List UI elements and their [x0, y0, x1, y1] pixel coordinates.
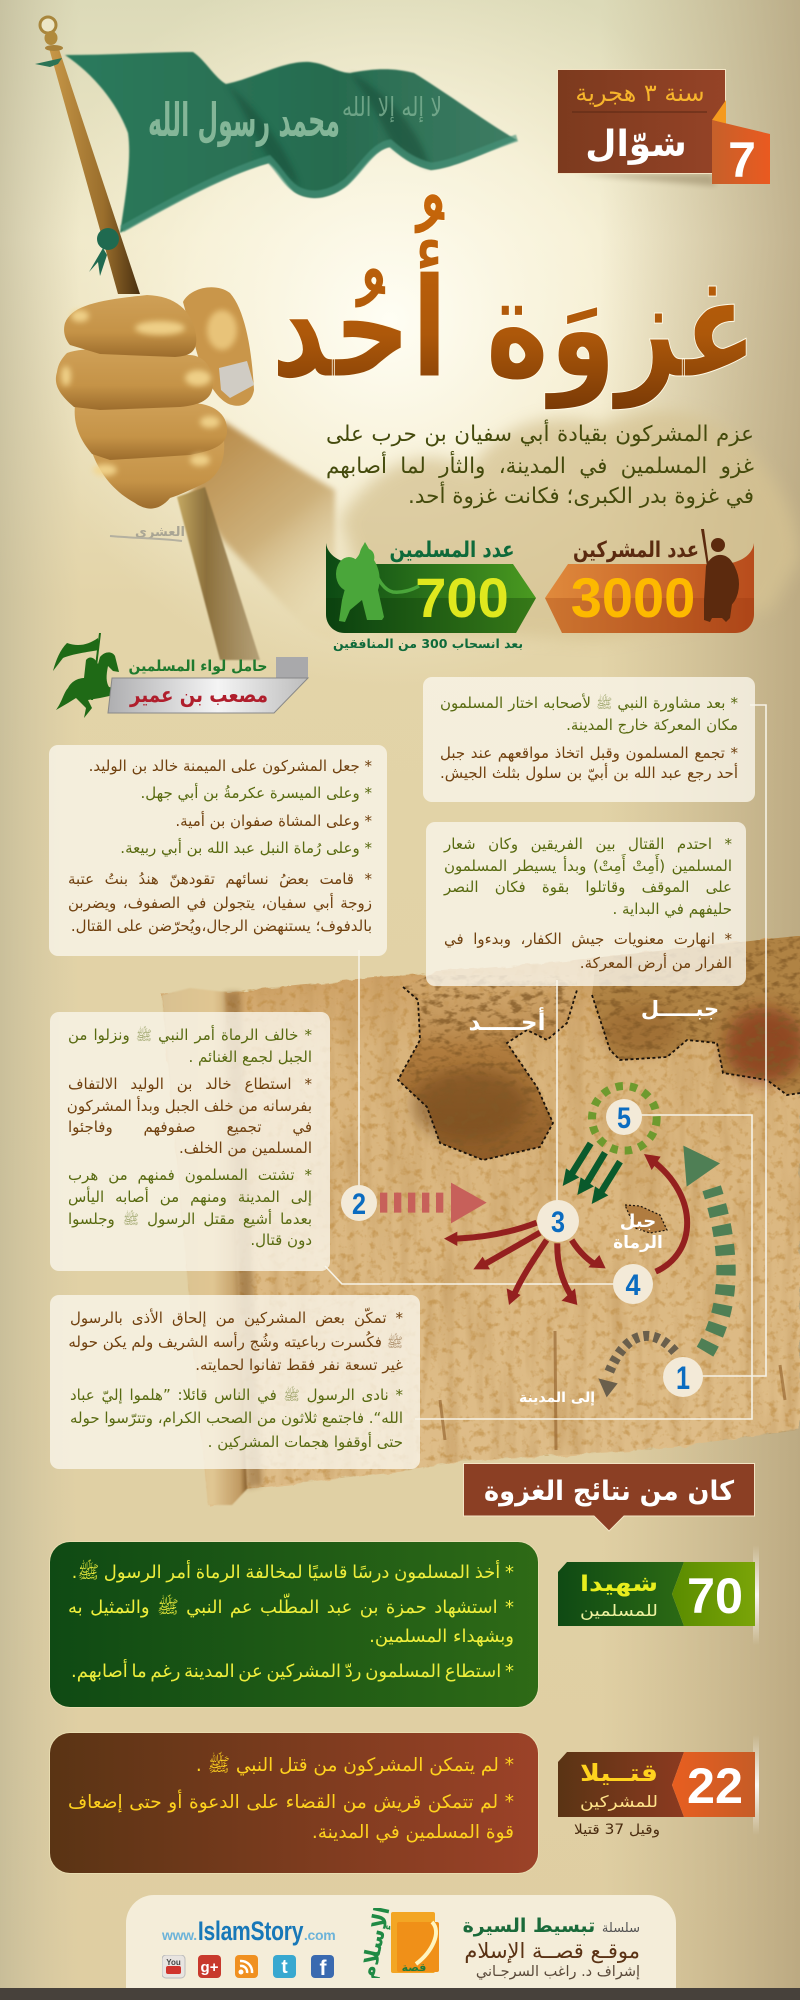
panel: battle begins: على الموقف وقاتلوا بقوة فكان النصر [444, 878, 732, 896]
forearm [190, 420, 335, 640]
panel: consultation: أحد رجع عبد الله بن أبيّ بن سلول بثلث الجيش. [440, 764, 738, 782]
date box [558, 70, 770, 188]
supervisor: إشراف د. راغب السرجـاني [476, 1964, 640, 1980]
panel: archers disobey: بفرسانه من خلف الجبل وبدأ المشركون [67, 1097, 312, 1115]
withdrawal note: بعد انسحاب 300 من المنافقين [333, 636, 523, 651]
panel: harm to the Prophet [50, 1295, 420, 1469]
map parchment [160, 925, 800, 1525]
panel: harm to the Prophet: غير تسعة نفر فقط تفانوا لحمايته. [195, 1356, 403, 1374]
panel: archers disobey: إلى المدينة ومنهم من أصابه اليأس [68, 1188, 312, 1206]
marker 1: 1 [676, 1360, 690, 1396]
intro text [326, 420, 754, 509]
icon: twitter: t [281, 1957, 288, 1978]
badge: 22 killed: 22 [687, 1758, 743, 1814]
panel: army positions: * جعل المشركون على الميمنة خالد بن الوليد. [89, 757, 372, 775]
panel: consultation: * بعد مشاورة النبي ﷺ لأصحابه اختار المسلمون [440, 694, 738, 712]
panel: army positions: زوجة أبي سفيان، يتجولن في الصفوف، ويضربن [68, 894, 372, 912]
badge: 70 martyrs [558, 1545, 759, 1645]
panel: harm to the Prophet: الله“. فاجتمع ثلاثون من الصحب الكرام، وتترّسوا حوله [70, 1409, 403, 1427]
fist highlights [61, 310, 220, 476]
footer panel [126, 1895, 676, 1988]
stat: polytheists: 3000 [571, 566, 695, 629]
site name: موقـع قصــة الإسلام [464, 1939, 640, 1963]
panel: results green [50, 1542, 538, 1707]
panel: battle begins [426, 822, 746, 986]
panel: results brown: قوة المسلمين في المدينة. [312, 1822, 514, 1843]
map place labels: جبـــــل [641, 997, 719, 1021]
social icons [162, 1955, 334, 1979]
map place labels: إلى المدينة [519, 1390, 595, 1406]
mountain: archers hill [625, 1205, 667, 1233]
icon: rss [235, 1955, 258, 1978]
icon: google plus: g+ [201, 1959, 219, 1976]
icon: google plus [198, 1955, 221, 1978]
website [162, 1916, 335, 1946]
circle markers [341, 1099, 703, 1397]
stat: muslims: عدد المسلمين [390, 538, 514, 563]
panel: army positions [49, 745, 387, 956]
website: www. .com [162, 1927, 335, 1943]
stat: polytheists: عدد المشركين [573, 538, 699, 563]
panel: archers disobey: المسلمين من الخلف. [179, 1139, 312, 1157]
panel: archers disobey [50, 1012, 330, 1271]
panel: archers disobey: * تشتت المسلمون فمنهم من هرب [68, 1166, 312, 1184]
panel: results brown: * لم تتمكن قريش من القضاء على الدعوة أو حتى إضعاف [68, 1792, 514, 1813]
panel: army positions: * وعلى الميسرة عكرمةُ بن أبي جهل. [140, 784, 372, 802]
arrow: archers dashed red [380, 1183, 487, 1223]
marker 5 [606, 1099, 642, 1135]
results heading: كان من نتائج الغزوة [484, 1476, 734, 1507]
arrows: red dispersal [444, 1154, 687, 1305]
knot [35, 58, 119, 276]
intro text: غزو المسلمين في المدينة، والثأر لما أصابهم [326, 454, 754, 479]
panel: results green: * استطاع المسلمون ردّ المشركين عن المدينة رغم ما أصابهم. [71, 1661, 514, 1682]
scroll roll [162, 988, 247, 1505]
badge: 70 martyrs: للمسلمين [580, 1601, 658, 1621]
panel: results green: * أخذ المسلمون درسًا قاسيًا لمخالفة الرماة أمر الرسول ﷺ. [72, 1562, 514, 1583]
badge: 22 killed: وقيل 37 قتيلا [574, 1822, 660, 1838]
battle diagram arrows [380, 1086, 726, 1397]
flag inscription: لا إله إلا الله [342, 93, 442, 123]
icon: twitter [273, 1955, 296, 1978]
mountain: right [592, 925, 800, 1095]
connector lines [325, 705, 766, 1419]
marker 4 [613, 1264, 653, 1304]
panel: army positions: * وعلى رُماة النبل عبد الله بن أبي ربيعة. [120, 839, 372, 857]
mountain: Uhud left [398, 975, 577, 1160]
fist [56, 287, 254, 509]
badge: 70 martyrs: شهيدا [580, 1572, 658, 1597]
panel: consultation: مكان المعركة خارج المدينة. [566, 716, 738, 734]
marker 5: 5 [617, 1102, 631, 1135]
ring: battle marker 5 [592, 1086, 657, 1151]
logo: قصة [402, 1961, 426, 1974]
flag bearer [53, 633, 308, 718]
thumb nail [219, 361, 254, 398]
ink streaks [440, 1331, 785, 1450]
mountain texture [390, 925, 800, 1165]
panel: results green: وبشهداء المسلمين. [369, 1626, 514, 1647]
date box: سنة ٣ هجرية [575, 79, 705, 107]
panel: archers disobey: دون قتال. [250, 1231, 312, 1249]
panel: battle begins: الفرار من أرض المعركة. [580, 954, 732, 972]
date badge: 7 [728, 132, 756, 188]
panel: battle begins: * انهارت معنويات جيش الكفار، وبدءوا في [444, 930, 732, 948]
panel: archers disobey: * استطاع خالد بن الوليد الالتفاف [68, 1075, 312, 1093]
flag pole lower part [177, 487, 260, 660]
flag bearer: مصعب بن عمير [129, 683, 268, 707]
arrow: dashed green march [683, 1146, 726, 1352]
flag [35, 17, 517, 294]
panel: army positions: بالدفوف؛ يستنهضن الرجال،ويُحرّضن على القتال. [71, 917, 372, 935]
panel: results brown [50, 1733, 538, 1873]
icon: youtube: You [166, 1958, 181, 1967]
panel: archers disobey: * خالف الرماة أمر النبي ﷺ ونزلوا من [68, 1026, 312, 1044]
mountain outlines [398, 987, 800, 1160]
icon: swordsman [336, 542, 419, 622]
icon: horseman [53, 633, 124, 718]
pole top [40, 17, 140, 294]
date badge [712, 100, 770, 188]
panel: results brown: * لم يتمكن المشركون من قتل النبي ﷺ . [196, 1755, 514, 1776]
panel: battle begins: حليفهم في البداية . [612, 900, 732, 918]
panel: battle begins: المسلمين (أَمِتْ أَمِتْ) وبدأ يسيطر المسلمون [444, 857, 732, 875]
panel: results green: * استشهاد حمزة بن عبد المطّلب عم النبي ﷺ والتمثيل به [68, 1597, 514, 1618]
logo [358, 1908, 439, 1978]
badge: 70 martyrs: 70 [687, 1568, 743, 1624]
badge: 22 killed: للمشركين [580, 1792, 658, 1812]
badge: 22 killed [558, 1735, 759, 1838]
panel: battle begins: * احتدم القتال بين الفريقين وكان شعار [444, 835, 732, 853]
icon: spearman [701, 529, 739, 622]
flag inscription: محمد رسول الله [148, 93, 340, 147]
silver ribbon [108, 657, 308, 713]
map place labels: أحـــــد [468, 1006, 546, 1036]
panel: consultation: * تجمع المسلمون وقبل اتخاذ مواقعهم عند جبل [440, 744, 738, 762]
marker 4: 4 [626, 1269, 641, 1302]
panel: army positions: * وعلى المشاة صفوان بن أمية. [175, 812, 372, 830]
website: IslamStory [198, 1916, 303, 1946]
flag bearer: حامل لواء المسلمين [128, 657, 268, 675]
panel: army positions: * قامت بعضُ نسائهم تقودهنّ هندُ بنتُ عتبة [68, 870, 372, 888]
stat: muslims [326, 538, 536, 633]
panel: archers disobey: بعدما أشيع مقتل الرسول ﷺ وجلسوا [68, 1210, 312, 1228]
icon: facebook [311, 1955, 334, 1980]
marker 2 [341, 1185, 377, 1221]
marker 3: 3 [551, 1206, 565, 1239]
panel: archers disobey: الجبل لجمع الغنائم . [188, 1048, 312, 1066]
watermark [110, 525, 185, 541]
date box: شوّال [585, 124, 687, 165]
panel: consultation [423, 677, 755, 802]
intro text: عزم المشركون بقيادة أبي سفيان بن حرب على [326, 422, 754, 447]
icon: youtube [162, 1955, 185, 1978]
panel: harm to the Prophet: * تمكّن بعض المشركين من إلحاق الأذى بالرسول [70, 1309, 403, 1327]
marker 1 [663, 1357, 703, 1397]
map place labels [468, 997, 719, 1406]
arrow: grey dashed to Madinah [598, 1336, 675, 1397]
watermark: العشرى [135, 525, 185, 540]
intro text: في غزوة بدر الكبرى؛ فكانت غزوة أحد. [408, 484, 754, 509]
badge: 22 killed: قتــيلا [580, 1759, 658, 1787]
results heading [464, 1464, 754, 1531]
bottom bar [0, 1988, 800, 2000]
arrows: green retreat [563, 1143, 620, 1204]
marker 3 [537, 1200, 579, 1242]
map place labels: جبل [620, 1211, 656, 1232]
panel: harm to the Prophet: حتى أوقفوا هجمات المشركين . [208, 1433, 403, 1451]
series name: سلسلة تبسيط السيرة [463, 1915, 640, 1937]
panel: harm to the Prophet: * نادى الرسول ﷺ في الناس قائلا: ”هلموا إليّ عباد [70, 1386, 403, 1404]
panel: harm to the Prophet: ﷺ فكُسرت رباعيته وشُج رأسه الشريف ولم يكن حوله [68, 1333, 403, 1351]
panel: archers disobey: في تجميع صفوفهم وفاجئوا [68, 1118, 312, 1136]
stat: muslims: 700 [415, 566, 509, 629]
map place labels: الرماة [613, 1233, 663, 1253]
stat: polytheists [545, 529, 754, 633]
marker 2: 2 [352, 1188, 366, 1221]
